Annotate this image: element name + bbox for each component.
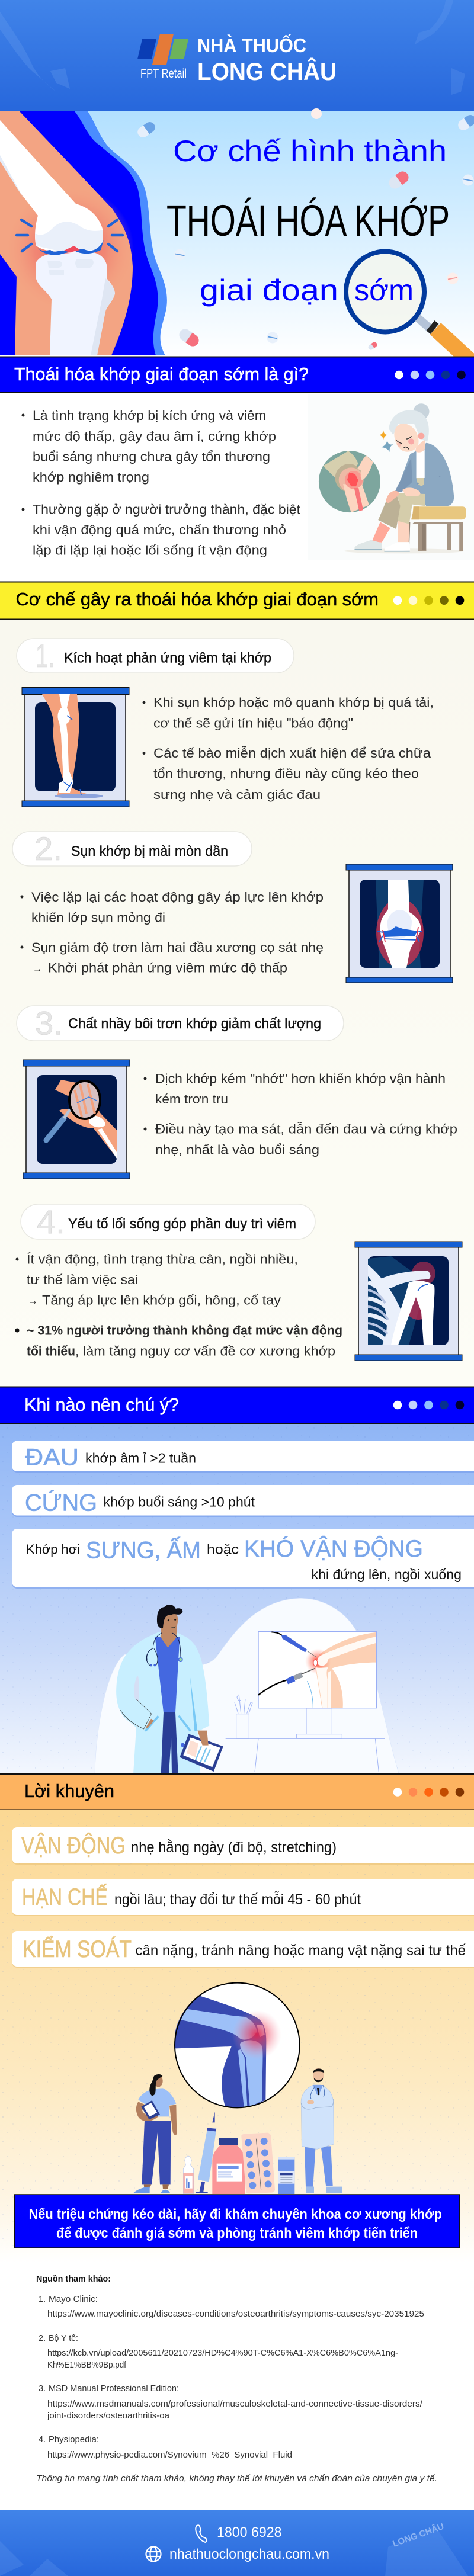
reference 2: 2.	[39, 2334, 46, 2343]
hero title: giai đoạn	[200, 274, 338, 307]
card: sưng ấm khó vận động: hoặc	[207, 1541, 239, 1557]
reference 2	[39, 2334, 398, 2370]
card: kiểm soát: KIỂM SOÁT	[23, 1935, 132, 1962]
step 4 text: ~ 31% người trưởng thành không đạt mức vận động	[27, 1323, 342, 1337]
card: vận động	[12, 1827, 474, 1865]
step 1 leg x-ray frame	[22, 687, 129, 807]
definition text	[21, 408, 300, 558]
card: cứng	[12, 1485, 474, 1517]
card: hạn chế: HẠN CHẾ	[22, 1883, 108, 1910]
step 4 shoulder x-ray frame	[355, 1242, 462, 1361]
card: hạn chế	[12, 1879, 474, 1916]
header band	[0, 0, 474, 111]
reference 3: joint-disorders/osteoarthritis-oa	[47, 2411, 170, 2421]
reference 3: 3.	[39, 2384, 46, 2394]
card: vận động: nhẹ hằng ngày (đi bộ, stretching)	[131, 1839, 337, 1856]
step 1 text: Các tế bào miễn dịch xuất hiện để sửa chữa	[153, 746, 431, 761]
step 3 text	[143, 1071, 457, 1157]
step 2 text: →	[33, 961, 42, 975]
step 3 text: Dịch khớp kém "nhớt" hơn khiến khớp vận hành	[155, 1071, 446, 1086]
card: hạn chế: ngồi lâu; thay đổi tư thế mỗi 45 - 60 phút	[114, 1891, 361, 1908]
card: sưng ấm khó vận động: SƯNG, ẤM	[86, 1536, 201, 1564]
step 3 text: Điều này tạo ma sát, dẫn đến đau và cứng khớp	[155, 1122, 457, 1136]
callout: see a specialist	[14, 2195, 460, 2248]
brand name	[197, 34, 337, 85]
phone number: 1800 6928	[217, 2524, 282, 2540]
step 2 text: khiến lớp sụn mỏng đi	[31, 910, 165, 925]
website: nhathuoclongchau.com.vn	[169, 2546, 329, 2562]
logo: FPT Retail: FPT Retail	[140, 67, 187, 81]
definition text: Thường gặp ở người trưởng thành, đặc biệt	[33, 502, 300, 517]
card: cứng: CỨNG	[25, 1489, 97, 1516]
reference 3: MSD Manual Professional Edition:	[49, 2384, 179, 2394]
step 2 pill heading	[12, 830, 252, 867]
step 1 text: tổn thương, nhưng điều này cũng kéo theo	[153, 766, 419, 781]
reference 3: https://www.msdmanuals.com/professional/musculoskeletal-and-connective-tissue-disorders/	[47, 2399, 423, 2409]
nurse	[133, 2074, 177, 2193]
callout: see a specialist: Nếu triệu chứng kéo dài, hãy đi khám chuyên khoa cơ xương khớp	[28, 2206, 442, 2222]
reference 4: https://www.physio-pedia.com/Synovium_%26_Synovial_Fluid	[47, 2450, 292, 2460]
step 4 pill heading: 4.	[37, 1203, 65, 1240]
step 1	[17, 637, 434, 807]
brand name: NHÀ THUỐC	[197, 34, 306, 56]
panel: mechanisms background	[0, 620, 474, 1387]
step 3 pill heading	[17, 1005, 344, 1041]
step 3 pill heading: Chất nhầy bôi trơn khớp giảm chất lượng	[68, 1016, 321, 1032]
step 3 hand x-ray frame	[23, 1060, 130, 1179]
section header: Lời khuyên	[0, 1774, 474, 1810]
icon: phone	[196, 2525, 206, 2542]
step 2 text: Việc lặp lại các hoạt động gây áp lực lên khớp	[31, 890, 324, 904]
brand name: LONG CHÂU	[197, 57, 337, 85]
step 1 pill heading: Kích hoạt phản ứng viêm tại khớp	[64, 650, 271, 666]
reference 2: Kh%E1%BB%9Bp.pdf	[47, 2360, 127, 2370]
section header: Khi nào nên chú ý?	[0, 1387, 474, 1424]
step 2 text	[20, 890, 324, 975]
section header: Thoái hóa khớp giai đoạn sớm là gì?: Thoái hóa khớp giai đoạn sớm là gì?	[14, 364, 309, 384]
illustration: doctor and knee procedure monitor	[95, 1598, 399, 1774]
step 2	[12, 830, 453, 983]
doctor figure	[116, 1605, 223, 1774]
step 4 text: tối thiểu	[27, 1343, 75, 1359]
reference 4	[39, 2435, 292, 2460]
section header: cơ chế	[0, 582, 474, 620]
step 3 text: kém trơn tru	[155, 1092, 228, 1106]
card: sưng ấm khó vận động: KHÓ VẬN ĐỘNG	[244, 1535, 423, 1562]
step 2 pill heading: Sụn khớp bị mài mòn dần	[71, 843, 228, 859]
definition text: mức độ thấp, gây đau âm ỉ, cứng khớp	[33, 429, 276, 444]
icon: magnifier over word sớm	[346, 251, 474, 364]
step 2 text: Sụn giảm độ trơn làm hai đầu xương cọ sát nhẹ	[31, 940, 324, 955]
medicines	[183, 2112, 294, 2194]
section header: Lời khuyên: Lời khuyên	[24, 1781, 114, 1801]
step 1 pill heading	[17, 637, 294, 674]
definition text: buổi sáng nhưng chưa gây tổn thương	[33, 449, 270, 464]
hero decorative pills	[136, 108, 474, 351]
panel: references	[36, 2275, 437, 2484]
hero title	[166, 134, 450, 307]
card: sưng ấm khó vận động: khi đứng lên, ngồi xuống	[312, 1567, 462, 1582]
reference 4: 4.	[39, 2435, 46, 2445]
step 4 text: tư thế làm việc sai	[27, 1272, 138, 1287]
card: đau	[12, 1441, 474, 1473]
card: đau: khớp âm ỉ >2 tuần	[85, 1450, 196, 1465]
definition text: khớp nghiêm trọng	[33, 470, 149, 485]
card: cứng: khớp buổi sáng >10 phút	[103, 1494, 255, 1509]
step 4 text: Tăng áp lực lên khớp gối, hông, cổ tay	[42, 1292, 281, 1308]
step 2 pill heading: 2.	[34, 830, 62, 867]
logo: FPT Retail	[137, 34, 188, 81]
section header: Thoái hóa khớp giai đoạn sớm là gì?	[0, 357, 474, 393]
step 4 text	[15, 1252, 342, 1359]
definition text: lặp đi lặp lại hoặc lối sống ít vận động	[33, 543, 267, 558]
step 4 text: →	[28, 1292, 38, 1308]
reference 4: Physiopedia:	[49, 2435, 99, 2445]
step 3 pill heading: 3.	[35, 1005, 63, 1041]
card: sưng ấm khó vận động: Khớp hơi	[26, 1541, 80, 1557]
hero panel	[0, 108, 474, 364]
doctor with arms crossed	[301, 2068, 342, 2193]
panel: warning signs	[0, 1424, 474, 1774]
definition text: Là tình trạng khớp bị kích ứng và viêm	[33, 408, 266, 423]
reference 1: Mayo Clinic:	[49, 2295, 98, 2304]
icon: globe	[146, 2547, 161, 2561]
clipboard	[180, 1731, 223, 1772]
step 1 pill heading: 1.	[36, 637, 55, 674]
reference 2: https://kcb.vn/upload/2005611/20210723/HD%C4%90T-C%C6%A1-X%C6%B0%C6%A1ng-	[47, 2349, 398, 2358]
card: đau: ĐAU	[25, 1444, 79, 1470]
reference 1: 1.	[39, 2295, 46, 2304]
icon: magnifier over word sớm: sớm	[354, 274, 414, 307]
card: vận động: VẬN ĐỘNG	[21, 1832, 126, 1859]
panel: advice	[0, 1810, 474, 2263]
disclaimer: Thông tin mang tính chất tham khảo, không thay thế lời khuyên và chẩn đoán của chuyên gia y tế.	[36, 2474, 437, 2484]
step 4 text: Ít vận động, tình trạng thừa cân, ngồi nhiều,	[27, 1252, 298, 1266]
reference 3	[39, 2384, 423, 2421]
callout: see a specialist: để được đánh giá sớm và phòng tránh viêm khớp tiến triển	[56, 2225, 418, 2241]
step 3	[17, 1005, 457, 1179]
step 1 text: Khi sụn khớp hoặc mô quanh khớp bị quá tải,	[153, 695, 434, 710]
illustration: knee circle, medical staff and medicines	[133, 1982, 342, 2194]
monitor with knee arthroscopy	[258, 1632, 376, 1708]
card: kiểm soát: cân nặng, tránh nâng hoặc mang vật nặng sai tư thế	[135, 1942, 466, 1959]
step 4	[15, 1203, 462, 1361]
section header: cơ chế: Cơ chế gây ra thoái hóa khớp giai đoạn sớm	[15, 589, 379, 609]
footer band: LONG CHÂU	[391, 2521, 446, 2549]
hero illustration: inflamed knee joint	[0, 111, 167, 355]
hero title: Cơ chế hình thành	[173, 134, 447, 168]
card: kiểm soát	[12, 1931, 474, 1968]
step 2 knee x-ray frame	[346, 864, 453, 983]
definition text: khi vận động quá mức, chấn thương nhỏ	[33, 522, 286, 537]
desk, stand and pen cup	[226, 1695, 385, 1772]
knee circle	[175, 1982, 300, 2108]
card: sưng ấm khó vận động	[12, 1529, 474, 1589]
reference 1	[39, 2295, 424, 2319]
step 4 pill heading: Yếu tố lối sống góp phần duy trì viêm	[68, 1216, 296, 1232]
step 3 text: nhẹ, nhất là vào buổi sáng	[155, 1142, 319, 1157]
step 1 text: sưng nhẹ và cảm giác đau	[153, 787, 321, 802]
step 1 text	[142, 695, 434, 802]
step 4 text: , làm tăng nguy cơ vấn đề cơ xương khớp	[75, 1343, 335, 1359]
step 4 pill heading	[21, 1203, 315, 1240]
references heading: Nguồn tham khảo:	[36, 2275, 111, 2284]
footer band	[0, 2510, 474, 2576]
illustration: elderly woman with knee pain	[308, 394, 474, 560]
reference 1: https://www.mayoclinic.org/diseases-conditions/osteoarthritis/symptoms-causes/syc-20351925	[47, 2309, 424, 2319]
panel: definition	[0, 393, 474, 582]
step 2 text: Khởi phát phản ứng viêm mức độ thấp	[48, 961, 287, 975]
step 1 text: cơ thể sẽ gửi tín hiệu "báo động"	[153, 716, 353, 731]
section header: Khi nào nên chú ý?: Khi nào nên chú ý?	[24, 1394, 179, 1415]
reference 2: Bộ Y tế:	[49, 2334, 78, 2343]
